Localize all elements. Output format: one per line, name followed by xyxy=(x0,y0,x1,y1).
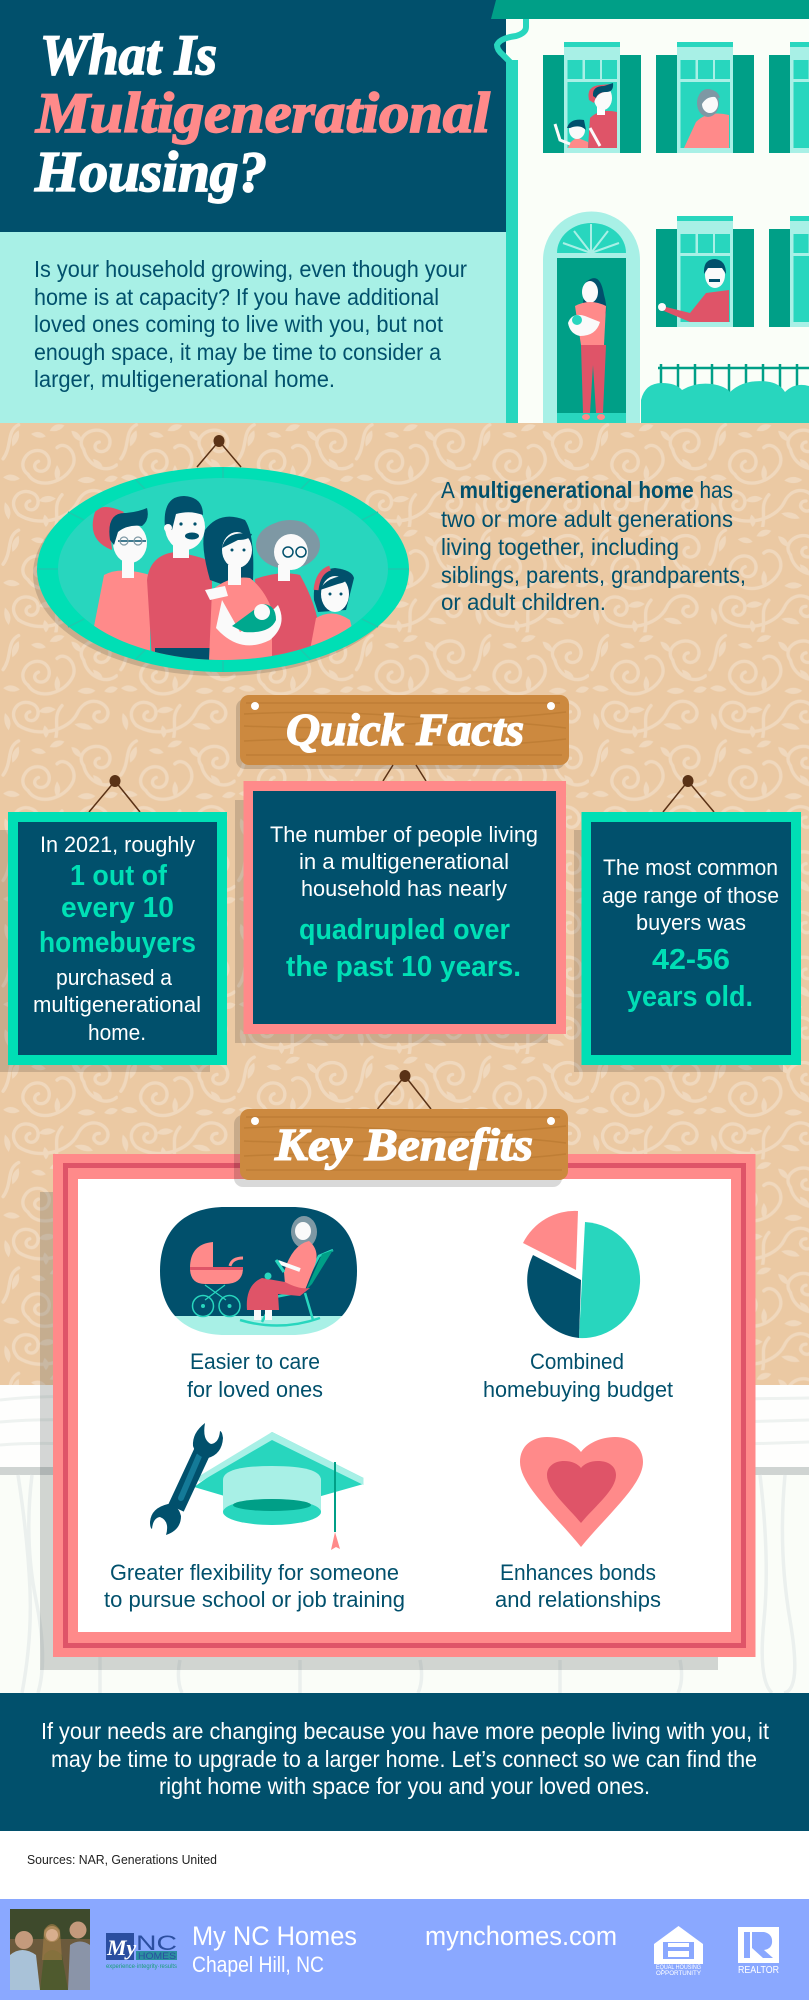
fact card: 1 out of every 10 xyxy=(0,812,227,1072)
title: Multigenerational xyxy=(35,82,490,145)
fact card: age range: 42-56 xyxy=(652,944,730,976)
fact card: age range xyxy=(574,812,801,1072)
fact card: age range: The most common xyxy=(603,855,778,880)
fact card: quadrupled: quadrupled over xyxy=(299,914,510,946)
fact card: 1 out of every 10: every 10 xyxy=(61,892,174,924)
footer agent name xyxy=(192,1921,357,1977)
caption: combined budget: Combined xyxy=(530,1349,624,1374)
definition text: A multigenerational home has xyxy=(441,477,733,503)
wainscot rail xyxy=(0,1467,809,1475)
wood sign: Key Benefits xyxy=(234,1109,568,1187)
house wall xyxy=(506,19,809,423)
grandmother xyxy=(247,1216,317,1320)
fact card: 1 out of every 10: In 2021, roughly xyxy=(40,832,195,857)
definition text: or adult children. xyxy=(441,589,606,615)
sources: Sources: NAR, Generations United xyxy=(27,1852,217,1867)
rocking chair xyxy=(240,1250,333,1326)
fact card: 1 out of every 10: multigenerational xyxy=(33,992,201,1017)
drain pipe xyxy=(497,19,526,423)
icon: grandmother in rocking chair with pram xyxy=(160,1207,357,1335)
footer band xyxy=(0,1899,809,2000)
hanger: left card xyxy=(89,775,140,812)
caption: combined budget: homebuying budget xyxy=(483,1377,673,1402)
wainscot lower panel xyxy=(0,1475,809,1693)
call to action band xyxy=(0,1693,809,1831)
icon: heart xyxy=(520,1437,643,1547)
icon: equal housing opportunity: EQUAL HOUSING xyxy=(656,1965,701,1971)
hanger strings: centre card xyxy=(383,765,426,781)
bushes xyxy=(641,381,809,423)
intro text: larger, multigenerational home. xyxy=(34,366,335,392)
footer logo: NC xyxy=(136,1932,177,1955)
fact card: 1 out of every 10: home. xyxy=(88,1020,146,1045)
footer agent name: Chapel Hill, NC xyxy=(192,1952,324,1977)
fact card: 1 out of every 10: 1 out of xyxy=(70,860,167,892)
fence xyxy=(658,364,809,423)
header panel: navy title block xyxy=(0,0,506,232)
caption: enhances bonds: and relationships xyxy=(495,1587,661,1612)
icon: realtor: REALTOR xyxy=(738,1965,779,1976)
definition text: siblings, parents, grandparents, xyxy=(441,562,746,588)
footer logo: My xyxy=(106,1935,137,1960)
hanger: right card xyxy=(663,775,714,812)
wood sign: Quick Facts: Quick Facts xyxy=(286,705,524,755)
call to action band: may be time to upgrade to a larger home. Let’s connect so we can find the xyxy=(51,1746,757,1772)
wallpaper background xyxy=(0,420,809,1386)
fact card: age range: buyers was xyxy=(636,910,746,935)
intro text: loved ones coming to live with you, but not xyxy=(34,311,444,337)
pram xyxy=(190,1242,243,1316)
footer logo: experience·integrity·results xyxy=(106,1964,177,1970)
footer logo xyxy=(106,1932,177,1970)
footer photo xyxy=(10,1909,90,1990)
family portrait xyxy=(33,467,409,676)
intro text: enough space, it may be time to consider a xyxy=(34,339,441,365)
footer website: mynchomes.com xyxy=(425,1921,617,1951)
fact card: age range: age range of those xyxy=(602,883,779,908)
grandmother xyxy=(255,520,322,665)
intro text: Is your household growing, even though your xyxy=(34,256,467,282)
call to action band: If your needs are changing because you have more people living with you, it xyxy=(41,1718,770,1744)
fact card: quadrupled: in a multigenerational xyxy=(299,849,509,874)
wood sign: Quick Facts xyxy=(236,695,569,769)
fact card: quadrupled: the past 10 years. xyxy=(286,951,521,983)
fact card: 1 out of every 10: purchased a xyxy=(56,965,173,990)
hanger: key benefits sign xyxy=(378,1070,431,1109)
icon: wrench and graduation cap xyxy=(150,1423,364,1550)
wainscot upper wood panel xyxy=(0,1385,809,1467)
fact card: quadrupled xyxy=(235,781,566,1043)
roof xyxy=(491,0,809,19)
icon: realtor xyxy=(738,1927,779,1976)
title: What Is xyxy=(40,24,217,87)
caption: easier to care: for loved ones xyxy=(187,1377,323,1402)
window: third upper xyxy=(769,42,809,153)
door with woman xyxy=(543,212,640,423)
caption: enhances bonds: Enhances bonds xyxy=(500,1560,656,1585)
call to action band: right home with space for you and your loved ones. xyxy=(159,1773,650,1799)
caption: greater flexibility: to pursue school or job training xyxy=(104,1587,405,1612)
intro text: home is at capacity? If you have additional xyxy=(34,284,439,310)
icon: pie chart xyxy=(523,1211,640,1338)
window: third lower xyxy=(769,216,809,327)
window: grandmother xyxy=(656,42,754,153)
fact card: quadrupled: The number of people living xyxy=(270,822,538,847)
hanger string: family portrait xyxy=(197,435,241,467)
intro panel xyxy=(0,232,506,423)
benefits frame xyxy=(53,1154,756,1657)
caption: greater flexibility: Greater flexibility for someone xyxy=(110,1560,399,1585)
footer logo: HOMES xyxy=(138,1951,176,1961)
icon: equal housing opportunity: OPPORTUNITY xyxy=(656,1971,701,1977)
window: man waving xyxy=(656,216,754,327)
footer agent name: My NC Homes xyxy=(192,1921,357,1951)
caption: combined budget xyxy=(483,1349,673,1402)
benefits frame shadow xyxy=(40,1192,718,1670)
boy with glasses xyxy=(90,507,150,660)
window: father and child xyxy=(543,42,641,153)
fact card: age range: years old. xyxy=(627,981,753,1013)
icon: equal housing opportunity xyxy=(654,1926,703,1977)
graduation cap xyxy=(194,1432,364,1550)
caption: greater flexibility xyxy=(104,1560,405,1612)
caption: enhances bonds xyxy=(495,1560,661,1612)
definition text: two or more adult generations xyxy=(441,506,733,532)
girl xyxy=(310,566,354,646)
house illustration xyxy=(491,0,809,423)
definition text xyxy=(441,477,746,615)
father xyxy=(147,496,212,668)
title: Housing? xyxy=(34,141,267,204)
caption: easier to care xyxy=(187,1349,323,1402)
intro text xyxy=(34,256,467,392)
wrench xyxy=(150,1423,223,1535)
fact card: quadrupled: household has nearly xyxy=(301,876,507,901)
mother with baby xyxy=(203,517,282,660)
title xyxy=(34,24,490,204)
fact card: 1 out of every 10: homebuyers xyxy=(39,927,196,959)
caption: easier to care: Easier to care xyxy=(190,1349,320,1374)
wood sign: Key Benefits: Key Benefits xyxy=(274,1120,533,1170)
definition text: living together, including xyxy=(441,534,679,560)
